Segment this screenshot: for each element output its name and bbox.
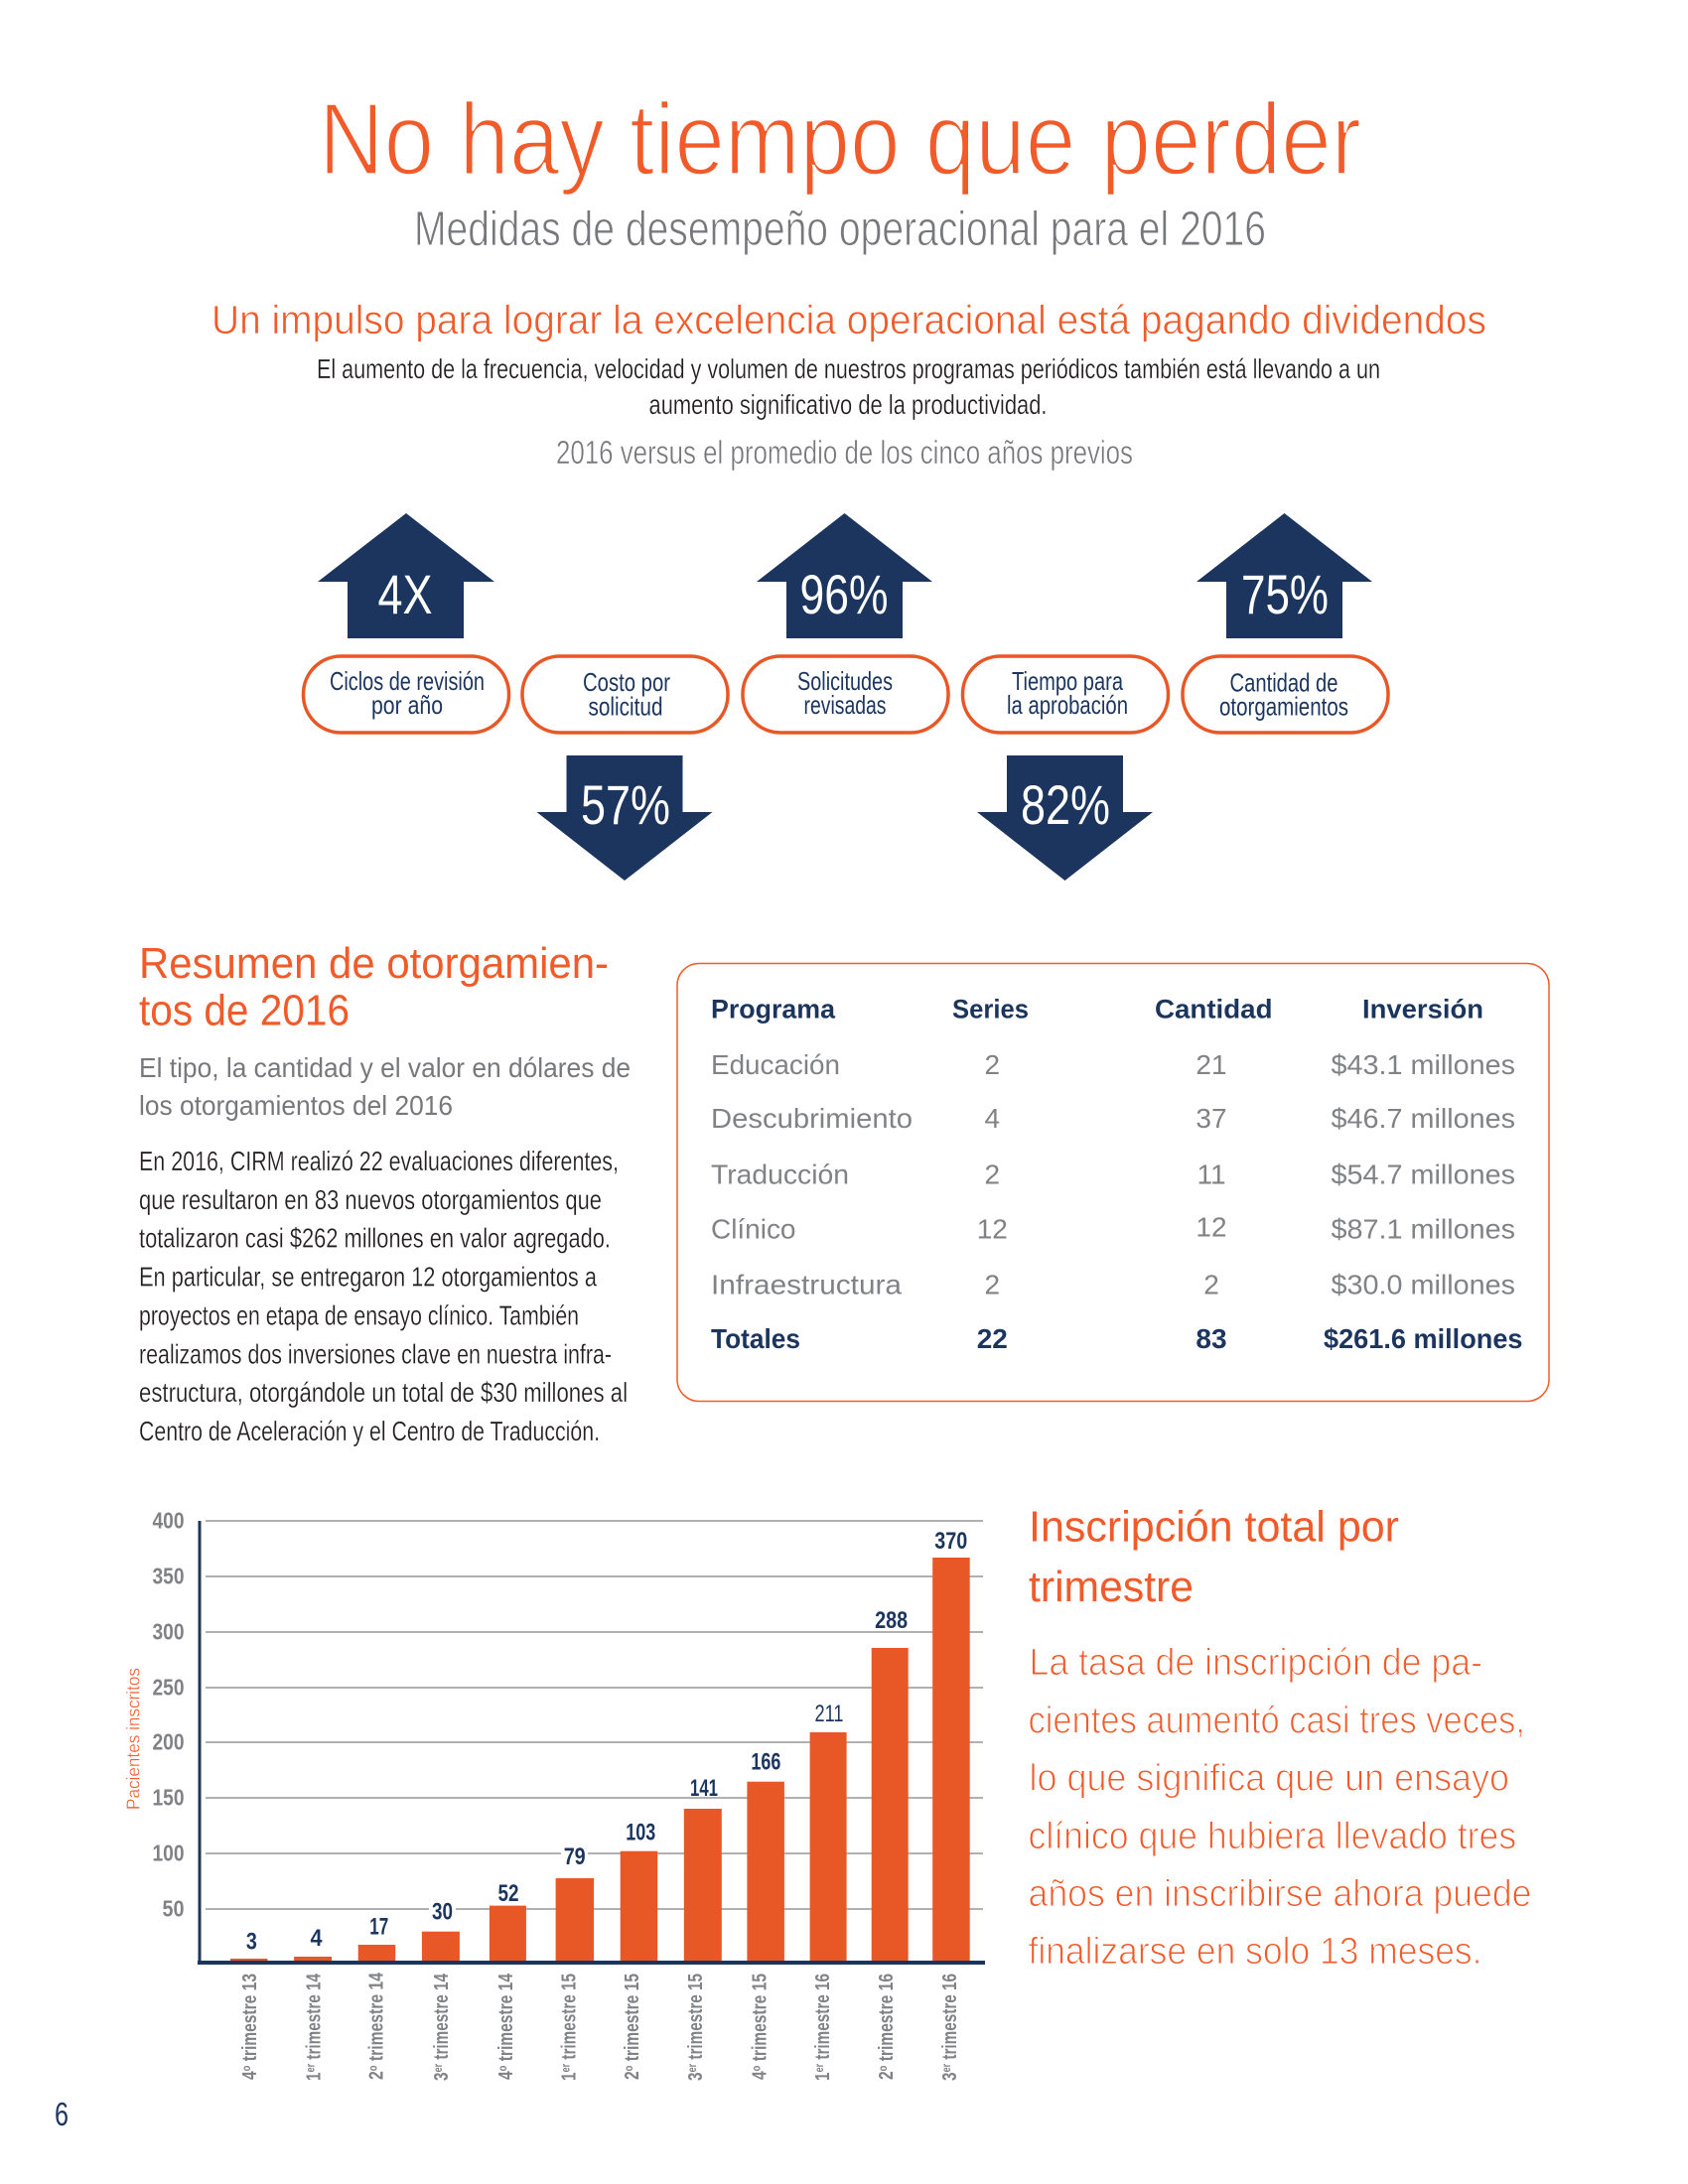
callout: enrollment text	[1029, 1642, 1531, 1973]
comparison caption: 2016 versus el promedio de los cinco años previos	[556, 434, 1133, 471]
x axis labels: 4	[749, 2069, 771, 2080]
pill: cost per application: solicitud	[588, 691, 663, 721]
value labels: 3	[246, 1928, 257, 1956]
row: Clínico: $87.1 millones	[1331, 1213, 1515, 1245]
row: Educación: 2	[985, 1049, 1000, 1080]
table header row: Programa	[711, 995, 836, 1024]
grants subheading: El tipo, la cantidad y el valor en dólares de	[139, 1052, 631, 1083]
metric: review cycles	[304, 513, 508, 733]
x axis labels: o	[495, 2066, 509, 2071]
row: Traducción: 2	[985, 1160, 1000, 1189]
pill: number of grants	[1183, 656, 1388, 733]
x axis labels: 2	[622, 2069, 643, 2080]
pill: time to approval: Tiempo para	[1012, 666, 1123, 696]
grants body text: estructura, otorgándole un total de $30 millones al	[139, 1377, 628, 1408]
heading: grants summary: tos de 2016	[139, 987, 350, 1034]
row: Clínico: 12	[1196, 1211, 1227, 1243]
x axis labels: trimestre 15	[685, 1974, 707, 2064]
x axis labels: trimestre 14	[304, 1973, 326, 2064]
x axis labels: 4	[495, 2069, 517, 2080]
row: Educación: $43.1 millones	[1331, 1049, 1515, 1080]
metric: number of grants	[1183, 513, 1388, 733]
heading: operational excellence: Un impulso para lograr la excelencia operacional está pagando dividendos	[211, 297, 1486, 342]
value labels: 4	[310, 1925, 323, 1952]
row: Clínico	[711, 1211, 1515, 1245]
subtitle: Medidas de desempeño operacional para el 2016	[414, 203, 1266, 256]
x axis labels: o	[622, 2066, 635, 2071]
pill: review cycles: por año	[371, 690, 443, 720]
grants body text: En 2016, CIRM realizó 22 evaluaciones diferentes,	[139, 1146, 619, 1176]
row: Clínico: 12	[977, 1213, 1008, 1245]
intro text: El aumento de la frecuencia, velocidad y volumen de nuestros programas periódicos también está llevando a un	[317, 353, 1380, 384]
pill: cost per application: Costo por	[583, 667, 670, 697]
row: Infraestructura: 2	[985, 1269, 1000, 1300]
x axis labels: o	[749, 2066, 763, 2071]
arrow down: 82%: 82%	[1021, 773, 1110, 836]
x axis labels: 3	[939, 2070, 961, 2081]
callout: enrollment text: años en inscribirse ahora puede	[1029, 1873, 1531, 1915]
x axis labels: trimestre 13	[239, 1974, 261, 2066]
x axis labels: 1	[812, 2070, 834, 2081]
row: Descubrimiento: 37	[1196, 1103, 1227, 1134]
row: Descubrimiento	[711, 1103, 1515, 1134]
heading: total enrollment: Inscripción total por	[1029, 1503, 1399, 1552]
value labels: 30	[432, 1898, 453, 1926]
x axis labels: o	[239, 2066, 253, 2071]
row: Clínico: Clínico	[711, 1213, 796, 1245]
arrow down: 57%: 57%	[581, 773, 670, 836]
value labels: 103	[626, 1820, 655, 1846]
grants subheading	[139, 1052, 631, 1121]
pill: cost per application	[522, 656, 728, 733]
x axis labels: 3	[431, 2070, 453, 2081]
arrow up: 75%: 75%	[1241, 563, 1329, 625]
row: Totales: $261.6 millones	[1324, 1323, 1523, 1354]
pill: applications reviewed: Solicitudes	[797, 666, 893, 696]
x axis labels: o	[366, 2065, 380, 2071]
value labels: 166	[751, 1749, 780, 1775]
x axis labels: trimestre 14	[366, 1972, 388, 2065]
x axis labels: trimestre 15	[749, 1974, 771, 2066]
y axis labels: 350	[153, 1563, 185, 1588]
value labels: 17	[369, 1914, 388, 1940]
row: Totales: 83	[1196, 1323, 1227, 1354]
x axis labels: er	[558, 2064, 572, 2073]
page number: 6	[55, 2096, 69, 2132]
value labels: 141	[690, 1775, 718, 1802]
x axis labels: trimestre 14	[495, 1973, 517, 2066]
row: Traducción: Traducción	[711, 1160, 849, 1189]
x axis labels: trimestre 16	[812, 1974, 834, 2064]
value labels: 79	[564, 1843, 586, 1870]
value labels: 370	[934, 1528, 967, 1555]
x axis labels: er	[685, 2064, 699, 2073]
callout: enrollment text: cientes aumentó casi tres veces,	[1029, 1700, 1525, 1741]
x axis labels: trimestre 15	[558, 1974, 580, 2064]
pill: number of grants: otorgamientos	[1219, 691, 1348, 721]
value labels	[246, 1528, 967, 1956]
intro text: aumento significativo de la productividad.	[649, 389, 1047, 420]
x axis labels: o	[876, 2066, 890, 2071]
heading: grants summary	[139, 939, 609, 1034]
value labels: 52	[498, 1880, 518, 1907]
y axis labels: 50	[163, 1896, 185, 1922]
y axis title: Pacientes inscritos	[123, 1668, 143, 1810]
bar chart: enrollment by quarter	[123, 1507, 985, 2081]
x axis labels: 3	[685, 2070, 707, 2081]
callout: enrollment text: La tasa de inscripción de pa-	[1029, 1642, 1482, 1684]
pill: review cycles: Ciclos de revisión	[330, 666, 485, 696]
table header row	[711, 995, 1483, 1024]
pill: time to approval	[963, 656, 1168, 733]
row: Traducción: 11	[1196, 1160, 1226, 1189]
row: Totales	[711, 1323, 1523, 1354]
callout: enrollment text: finalizarse en solo 13 meses.	[1029, 1931, 1481, 1973]
value labels: 211	[814, 1701, 844, 1727]
pill: review cycles	[304, 656, 508, 733]
row: Traducción: $54.7 millones	[1331, 1160, 1515, 1189]
grants body text	[139, 1146, 628, 1446]
grants body text: proyectos en etapa de ensayo clínico. También	[139, 1300, 579, 1330]
arrow up: 4X: 4X	[377, 563, 433, 625]
x axis labels: er	[812, 2064, 826, 2073]
row: Infraestructura: Infraestructura	[711, 1269, 902, 1300]
y axis labels: 400	[153, 1507, 185, 1533]
table header row: Series	[952, 995, 1029, 1024]
arrow up: 4X	[318, 513, 494, 638]
arrow up: 75%	[1196, 513, 1372, 638]
row: Educación	[711, 1049, 1515, 1080]
bars	[230, 1558, 970, 1964]
grants body text: totalizaron casi $262 millones en valor agregado.	[139, 1223, 611, 1253]
x axis labels: trimestre 16	[876, 1974, 898, 2066]
x axis labels: trimestre 15	[622, 1974, 643, 2066]
arrow up: 96%	[757, 513, 932, 638]
callout: enrollment text: lo que significa que un ensayo	[1029, 1757, 1509, 1799]
heading: grants summary: Resumen de otorgamien-	[139, 939, 609, 988]
grants body text: realizamos dos inversiones clave en nuestra infra-	[139, 1338, 612, 1370]
x axis labels: trimestre 16	[939, 1974, 961, 2064]
arrow down: 57%	[536, 755, 713, 881]
y axis labels: 200	[153, 1729, 185, 1755]
x axis labels: 2	[366, 2069, 388, 2080]
pill: applications reviewed	[743, 656, 948, 733]
x axis labels: 4	[239, 2069, 261, 2080]
y axis labels: 250	[153, 1674, 185, 1700]
row: Infraestructura	[711, 1269, 1515, 1300]
x axis labels: trimestre 14	[431, 1973, 453, 2064]
arrow down: 82%	[977, 755, 1153, 881]
pill: time to approval: la aprobación	[1007, 690, 1128, 720]
gridlines	[206, 1521, 983, 1909]
row: Educación: 21	[1196, 1049, 1227, 1080]
y axis labels: 300	[153, 1618, 185, 1644]
row: Infraestructura: $30.0 millones	[1331, 1269, 1515, 1300]
heading: total enrollment	[1029, 1503, 1399, 1611]
heading: total enrollment: trimestre	[1029, 1563, 1194, 1611]
grants body text: En particular, se entregaron 12 otorgamientos a	[139, 1261, 597, 1293]
metric: applications reviewed	[743, 513, 948, 733]
callout: enrollment text: clínico que hubiera llevado tres	[1029, 1816, 1516, 1857]
panel: grants table	[677, 963, 1549, 1402]
grants subheading: los otorgamientos del 2016	[139, 1090, 453, 1121]
pill: number of grants: Cantidad de	[1229, 667, 1338, 697]
y axis labels: 100	[153, 1841, 185, 1866]
row: Totales: 22	[977, 1323, 1008, 1354]
row: Descubrimiento: Descubrimiento	[711, 1103, 913, 1134]
x axis labels	[239, 1972, 961, 2081]
y axis labels: 150	[153, 1785, 185, 1811]
y axis labels	[153, 1507, 185, 1922]
row: Infraestructura: 2	[1203, 1269, 1219, 1300]
grants body text: Centro de Aceleración y el Centro de Traducción.	[139, 1416, 600, 1446]
table header row: Inversión	[1362, 995, 1483, 1024]
row: Educación: Educación	[711, 1049, 840, 1080]
row: Totales: Totales	[711, 1323, 800, 1354]
x axis labels: er	[431, 2064, 445, 2073]
intro text	[317, 353, 1380, 420]
value labels: 288	[875, 1607, 908, 1634]
axes	[198, 1521, 985, 1965]
x axis labels: 1	[558, 2070, 580, 2081]
x axis labels: er	[939, 2064, 953, 2073]
metric: time to approval	[963, 656, 1168, 881]
metric: cost per application	[522, 656, 728, 881]
table header row: Cantidad	[1155, 995, 1273, 1024]
x axis labels: 1	[304, 2070, 326, 2081]
pill: applications reviewed: revisadas	[804, 690, 886, 720]
x axis labels: 2	[876, 2069, 898, 2080]
row: Descubrimiento: $46.7 millones	[1331, 1103, 1515, 1134]
title: No hay tiempo que perder	[319, 81, 1361, 197]
row: Traducción	[711, 1160, 1515, 1189]
arrow up: 96%: 96%	[800, 563, 888, 625]
row: Descubrimiento: 4	[985, 1103, 1000, 1134]
grants body text: que resultaron en 83 nuevos otorgamientos que	[139, 1184, 602, 1215]
x axis labels: er	[304, 2064, 318, 2073]
